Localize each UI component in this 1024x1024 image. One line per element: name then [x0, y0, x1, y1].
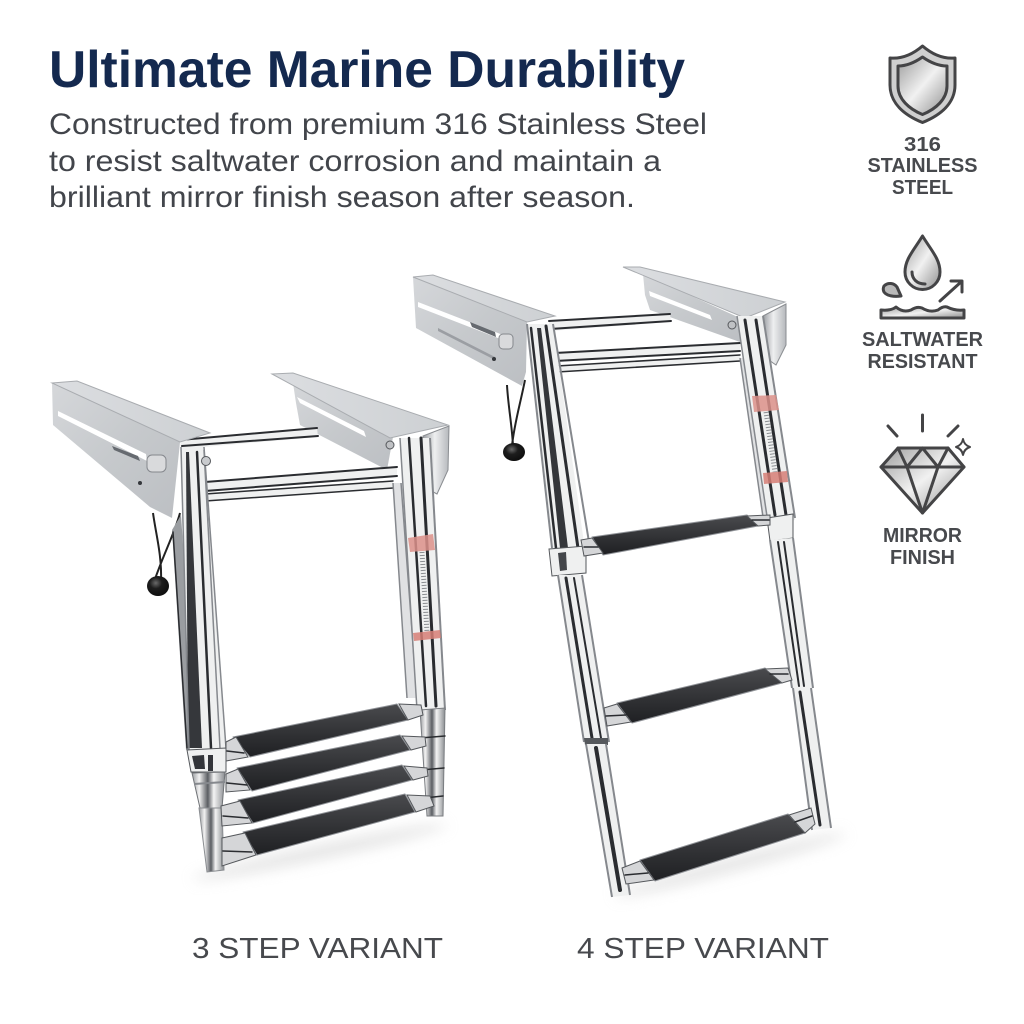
lanyard with ball — [503, 380, 525, 461]
step treads — [592, 515, 805, 881]
icon: diamond — [881, 415, 970, 513]
ladder: 4 step variant — [413, 267, 848, 903]
right rail — [393, 438, 445, 816]
label: mirror finish: MIRROR — [883, 525, 963, 547]
step end fittings — [581, 515, 815, 884]
left rail — [527, 324, 630, 897]
left mounting bracket — [52, 381, 210, 518]
title: Ultimate Marine Durability — [49, 41, 685, 99]
description text block: to resist saltwater corrosion and maintain a — [49, 145, 661, 178]
step treads — [233, 704, 415, 855]
tread 4 — [243, 794, 415, 855]
caption: 4 step variant: 4 STEP VARIANT — [577, 933, 829, 965]
left mounting bracket — [413, 275, 555, 386]
icon: shield — [890, 46, 955, 122]
panel: feature saltwater resistant — [862, 236, 984, 373]
label: 316 stainless steel: STEEL — [892, 177, 953, 199]
label: mirror finish — [883, 525, 963, 569]
floor shadow — [191, 818, 449, 886]
step end fittings — [221, 704, 434, 866]
label: saltwater resistant — [862, 329, 984, 373]
panel: feature 316 stainless steel — [868, 46, 978, 199]
tread 3 — [640, 814, 805, 881]
caption: 3 step variant: 3 STEP VARIANT — [192, 933, 443, 965]
tread 3 — [238, 765, 412, 823]
right mounting bracket — [623, 267, 786, 365]
lower crossbars — [555, 342, 740, 372]
label: 316 stainless steel — [868, 134, 978, 199]
label: 316 stainless steel: STAINLESS — [868, 155, 978, 177]
description text block: brilliant mirror finish season after season. — [49, 181, 635, 214]
lanyard with ball — [147, 513, 180, 596]
tread 1 — [233, 704, 408, 757]
lower crossbars — [205, 467, 397, 502]
tread 2 — [617, 668, 782, 723]
right rail — [737, 316, 831, 830]
back crossbar — [549, 314, 671, 331]
tread 1 — [592, 515, 758, 555]
left rail — [172, 447, 226, 872]
label: mirror finish: FINISH — [890, 547, 955, 569]
label: saltwater resistant: SALTWATER — [862, 329, 984, 351]
tread 2 — [237, 735, 410, 791]
floor shadow — [612, 827, 848, 903]
right mounting bracket — [272, 373, 449, 494]
label: saltwater resistant: RESISTANT — [868, 351, 978, 373]
back crossbar — [180, 428, 318, 449]
ladder: 3 step variant — [52, 373, 449, 886]
description text block: Constructed from premium 316 Stainless Steel — [49, 108, 707, 141]
panel: feature mirror finish — [881, 415, 970, 569]
icon: water drop with waves — [881, 236, 964, 318]
label: 316 stainless steel: 316 — [904, 134, 941, 156]
description text block — [49, 108, 707, 214]
